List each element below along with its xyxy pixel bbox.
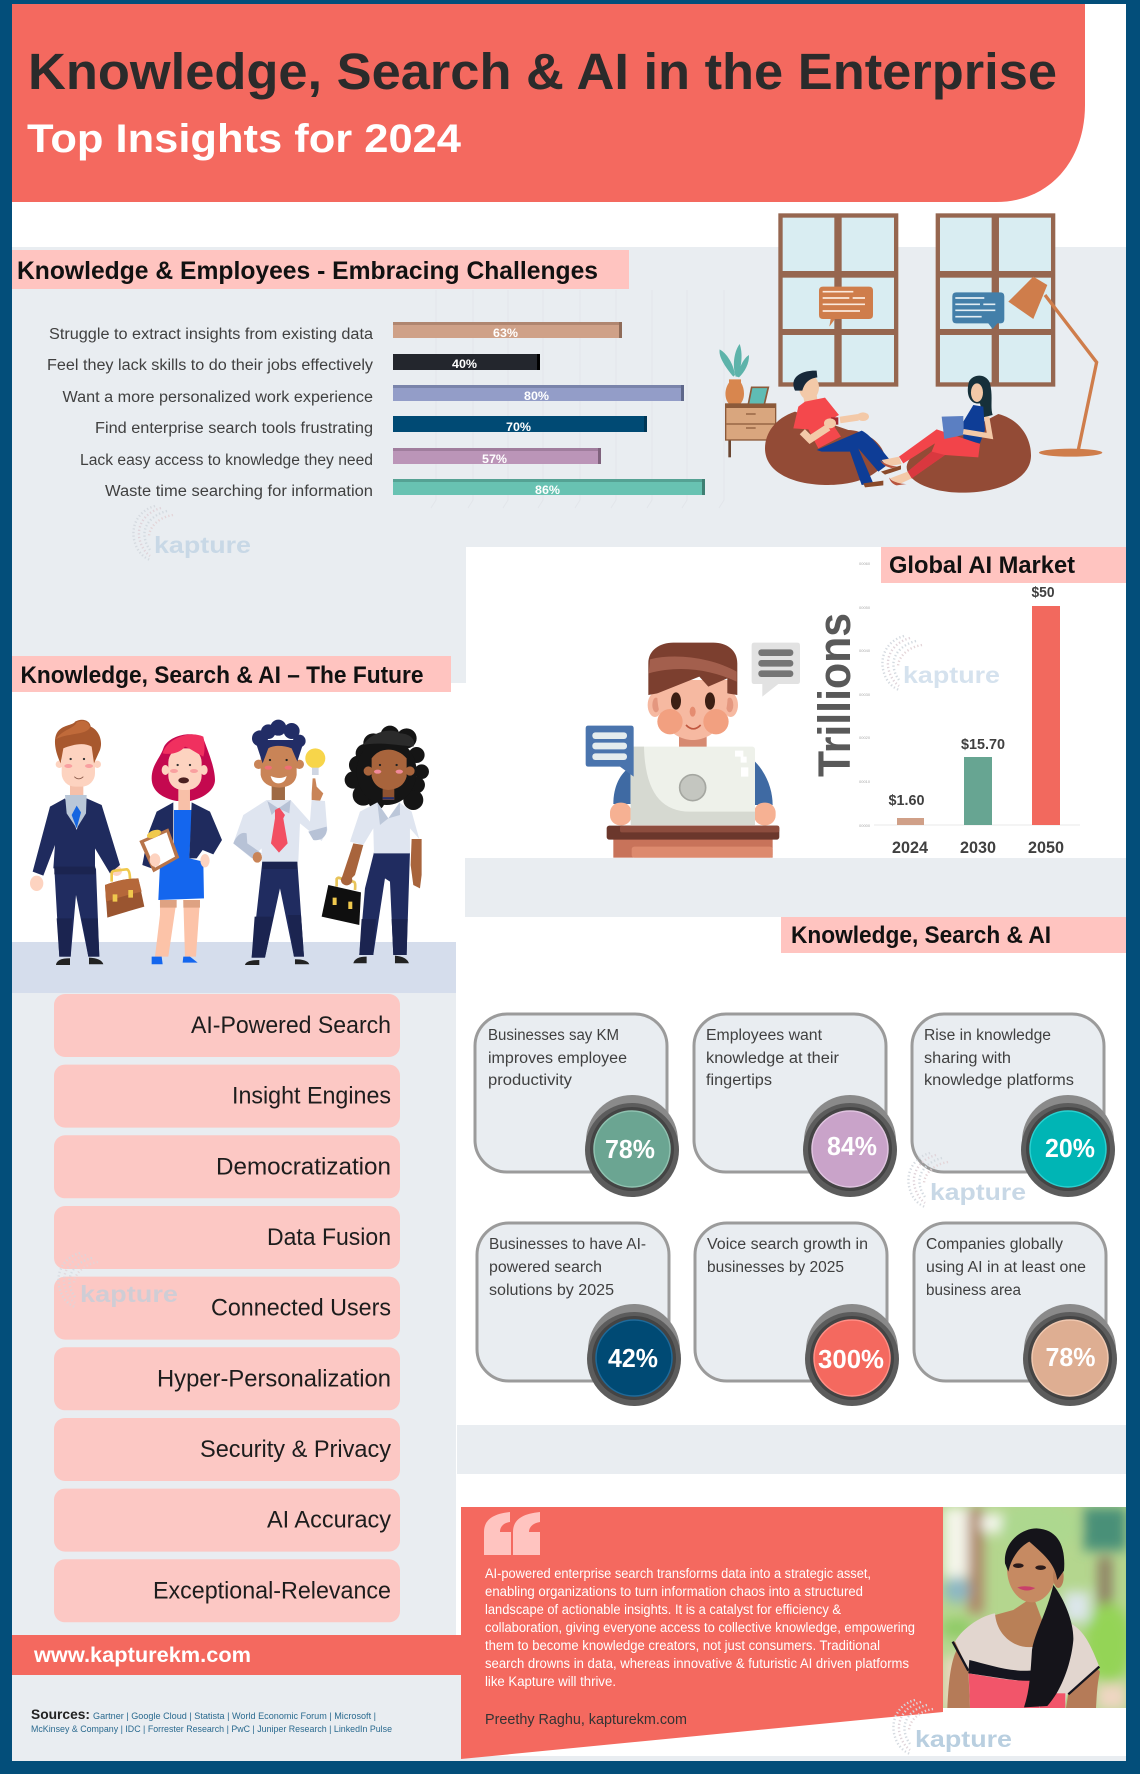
person: man with lightbulb idea [233, 720, 327, 965]
photo: Preethy Raghu [940, 1503, 1132, 1710]
stat card: voice search 300%: 300% [818, 1344, 884, 1374]
bar chart: employee challenges: Waste time searching for information [105, 483, 373, 500]
bar chart: global AI market: 00040 [859, 648, 871, 653]
stat card: AI adoption 78%: 78% [1046, 1342, 1096, 1372]
bar chart: global AI market: 00010 [859, 779, 871, 784]
stat card: KM productivity 78%: productivity [488, 1072, 572, 1089]
stat card: AI-powered search 42%: 42% [608, 1343, 658, 1373]
bar chart: global AI market: 00020 [859, 735, 871, 740]
sources [31, 1706, 392, 1735]
stat card: knowledge sharing 20%: knowledge platforms [924, 1072, 1074, 1089]
heading: global AI market: Global AI Market [889, 552, 1075, 579]
watermark: kapture: kapture [930, 1179, 1026, 1205]
watermark: kapture [908, 1153, 1026, 1207]
list: future trends: Exceptional-Relevance [153, 1577, 391, 1604]
quote text: landscape of actionable insights. It is a catalyst for efficiency & [485, 1602, 841, 1617]
icon: blue speech bubble [952, 292, 1004, 329]
watermark: kapture [58, 1253, 178, 1307]
list: future trends: AI-Powered Search [191, 1012, 391, 1039]
stat card: AI-powered search 42%: solutions by 2025 [489, 1282, 614, 1299]
list: future trends: Insight Engines [232, 1083, 391, 1110]
watermark: kapture [882, 636, 1000, 690]
quote text: AI-powered enterprise search transforms data into a strategic asset, [485, 1566, 871, 1581]
watermark: kapture [893, 1700, 1012, 1754]
stat card: AI adoption 78%: using AI in at least one [926, 1259, 1086, 1276]
sources: Gartner | Google Cloud | Statista | World Economic Forum | Microsoft | [93, 1711, 376, 1722]
bar chart: employee challenges: 63% [493, 326, 518, 340]
bar chart: employee challenges: Feel they lack skills to do their jobs effectively [47, 357, 373, 374]
sources: Sources: [31, 1706, 90, 1722]
watermark: kapture [133, 506, 251, 560]
list: future trends [54, 994, 400, 1622]
window left [778, 213, 898, 387]
heading: knowledge and employees: Knowledge & Employees - Embracing Challenges [17, 257, 598, 285]
heading: global AI market [881, 547, 1126, 583]
stat card: knowledge sharing 20% [912, 1014, 1115, 1197]
illustration: person at laptop [586, 643, 800, 858]
illustration: four professionals [30, 720, 429, 965]
icon: orange speech bubble [819, 287, 873, 327]
title: Knowledge, Search & AI in the Enterprise [28, 43, 1057, 100]
panel: knowledge search and AI stats [475, 917, 1126, 1406]
stat card: fingertips 84% [694, 1014, 897, 1197]
icon: blue speech bubble [586, 726, 634, 777]
watermark: kapture: kapture [903, 662, 1000, 688]
stat card: KM productivity 78% [475, 1014, 679, 1197]
bar chart: employee challenges: Lack easy access to knowledge they need [80, 452, 373, 469]
stat card: knowledge sharing 20%: 20% [1045, 1133, 1095, 1163]
woman [880, 376, 993, 485]
list: future trends: Hyper-Personalization [157, 1365, 391, 1392]
list: future trends: Connected Users [211, 1295, 391, 1322]
stat card: AI-powered search 42%: powered search [489, 1259, 602, 1276]
stat card: knowledge sharing 20%: Rise in knowledge [924, 1027, 1051, 1044]
bar chart: employee challenges: Struggle to extract insights from existing data [49, 326, 373, 343]
bar chart: global AI market: $50 [1032, 584, 1054, 601]
website banner: www.kapturekm.com [33, 1644, 251, 1667]
stat card: AI adoption 78%: Companies globally [926, 1236, 1063, 1253]
bar chart: global AI market: 00030 [859, 692, 871, 697]
beanbag left [765, 412, 885, 485]
stat card: KM productivity 78%: Businesses say KM [488, 1027, 619, 1044]
bar chart: global AI market: $15.70 [961, 736, 1005, 753]
quote text: them to become knowledge creators, not just consumers. Traditional [485, 1638, 880, 1653]
sources: McKinsey & Company | IDC | Forrester Research | PwC | Juniper Research | LinkedIn Pulse [31, 1724, 392, 1735]
bar chart: employee challenges: 57% [482, 452, 507, 466]
bar chart: global AI market: 2050 [1028, 839, 1064, 857]
watermark: kapture: kapture [80, 1281, 178, 1307]
stat card: fingertips 84%: knowledge at their [706, 1050, 839, 1067]
heading: knowledge search and AI [781, 917, 1126, 953]
icon: floor lamp [1008, 277, 1102, 457]
bar chart: global AI market: 2024 [892, 839, 929, 857]
person: man with briefcase [30, 720, 144, 965]
beanbag right [907, 414, 1031, 493]
illustration: room with windows and lamp [778, 213, 1102, 457]
bar chart: employee challenges: Want a more personalized work experience [62, 389, 373, 406]
bar chart: global AI market: $1.60 [888, 792, 924, 809]
bar chart: employee challenges: 86% [535, 483, 560, 497]
stat card: AI-powered search 42%: Businesses to have AI- [489, 1236, 646, 1253]
heading: knowledge search and AI: Knowledge, Search & AI [791, 922, 1051, 949]
panel: quote [461, 1503, 1132, 1759]
bar chart: global AI market: 00000 [859, 823, 871, 828]
quote text: enabling organizations to turn information chaos into a structured [485, 1584, 863, 1599]
list: future trends: Democratization [216, 1153, 391, 1180]
attribution: Preethy Raghu, kapturekm.com [485, 1712, 687, 1728]
stat card: fingertips 84%: 84% [827, 1131, 877, 1161]
quote text: collaboration, giving everyone access to collective knowledge, empowering [485, 1620, 915, 1635]
list: future trends: Security & Privacy [200, 1436, 391, 1463]
window right [936, 213, 1055, 387]
plant [719, 344, 749, 405]
illustration: colleagues on beanbags [719, 344, 1031, 493]
bar chart: global AI market: 00050 [859, 605, 871, 610]
list: future trends: Data Fusion [267, 1224, 391, 1251]
bar chart: employee challenges: 40% [452, 357, 477, 371]
nightstand [726, 387, 776, 457]
bar chart: global AI market: 00060 [859, 561, 871, 566]
bar chart: global AI market: 2030 [960, 839, 996, 857]
stat card: knowledge sharing 20%: sharing with [924, 1050, 1011, 1067]
bar chart: global AI market [859, 561, 1080, 857]
website banner [12, 1635, 461, 1675]
title banner [12, 4, 1085, 202]
bar chart: employee challenges: Find enterprise search tools frustrating [95, 420, 373, 437]
watermark: kapture: kapture [915, 1726, 1012, 1752]
panel: the future [12, 656, 465, 1622]
bar chart: employee challenges: 70% [506, 420, 531, 434]
heading: knowledge and employees [12, 250, 629, 289]
stat card: fingertips 84%: fingertips [706, 1072, 772, 1089]
person: woman with clipboard [139, 734, 222, 964]
stat card: voice search 300%: Voice search growth in [707, 1236, 868, 1253]
bar chart: employee challenges [47, 290, 724, 508]
stat card: KM productivity 78%: improves employee [488, 1050, 627, 1067]
panel: global AI market [466, 547, 1126, 858]
watermark: kapture: kapture [154, 532, 251, 558]
quote text: like Kapture will thrive. [485, 1674, 616, 1689]
stat card: AI adoption 78% [914, 1223, 1117, 1406]
quote text: search drowns in data, whereas innovative & futuristic AI driven platforms [485, 1656, 909, 1671]
stat card: AI-powered search 42% [477, 1223, 681, 1406]
bar chart: employee challenges: 80% [524, 389, 549, 403]
stat card: AI adoption 78%: business area [926, 1282, 1021, 1299]
icon: grey speech bubble [752, 643, 800, 697]
stat card: voice search 300%: businesses by 2025 [707, 1259, 844, 1276]
person: woman with black bag [322, 726, 429, 963]
icon: quotation mark [484, 1512, 540, 1555]
panel: knowledge and employees [12, 213, 1102, 560]
man [793, 371, 901, 487]
stat card: voice search 300% [695, 1223, 899, 1406]
subtitle: Top Insights for 2024 [27, 117, 462, 161]
heading: the future: Knowledge, Search & AI – The Future [20, 662, 424, 689]
list: future trends: AI Accuracy [267, 1507, 391, 1534]
stat card: KM productivity 78%: 78% [605, 1134, 655, 1164]
stat card: fingertips 84%: Employees want [706, 1027, 823, 1044]
axis title: trillions: Trillions [809, 613, 860, 777]
quote text [485, 1566, 915, 1689]
